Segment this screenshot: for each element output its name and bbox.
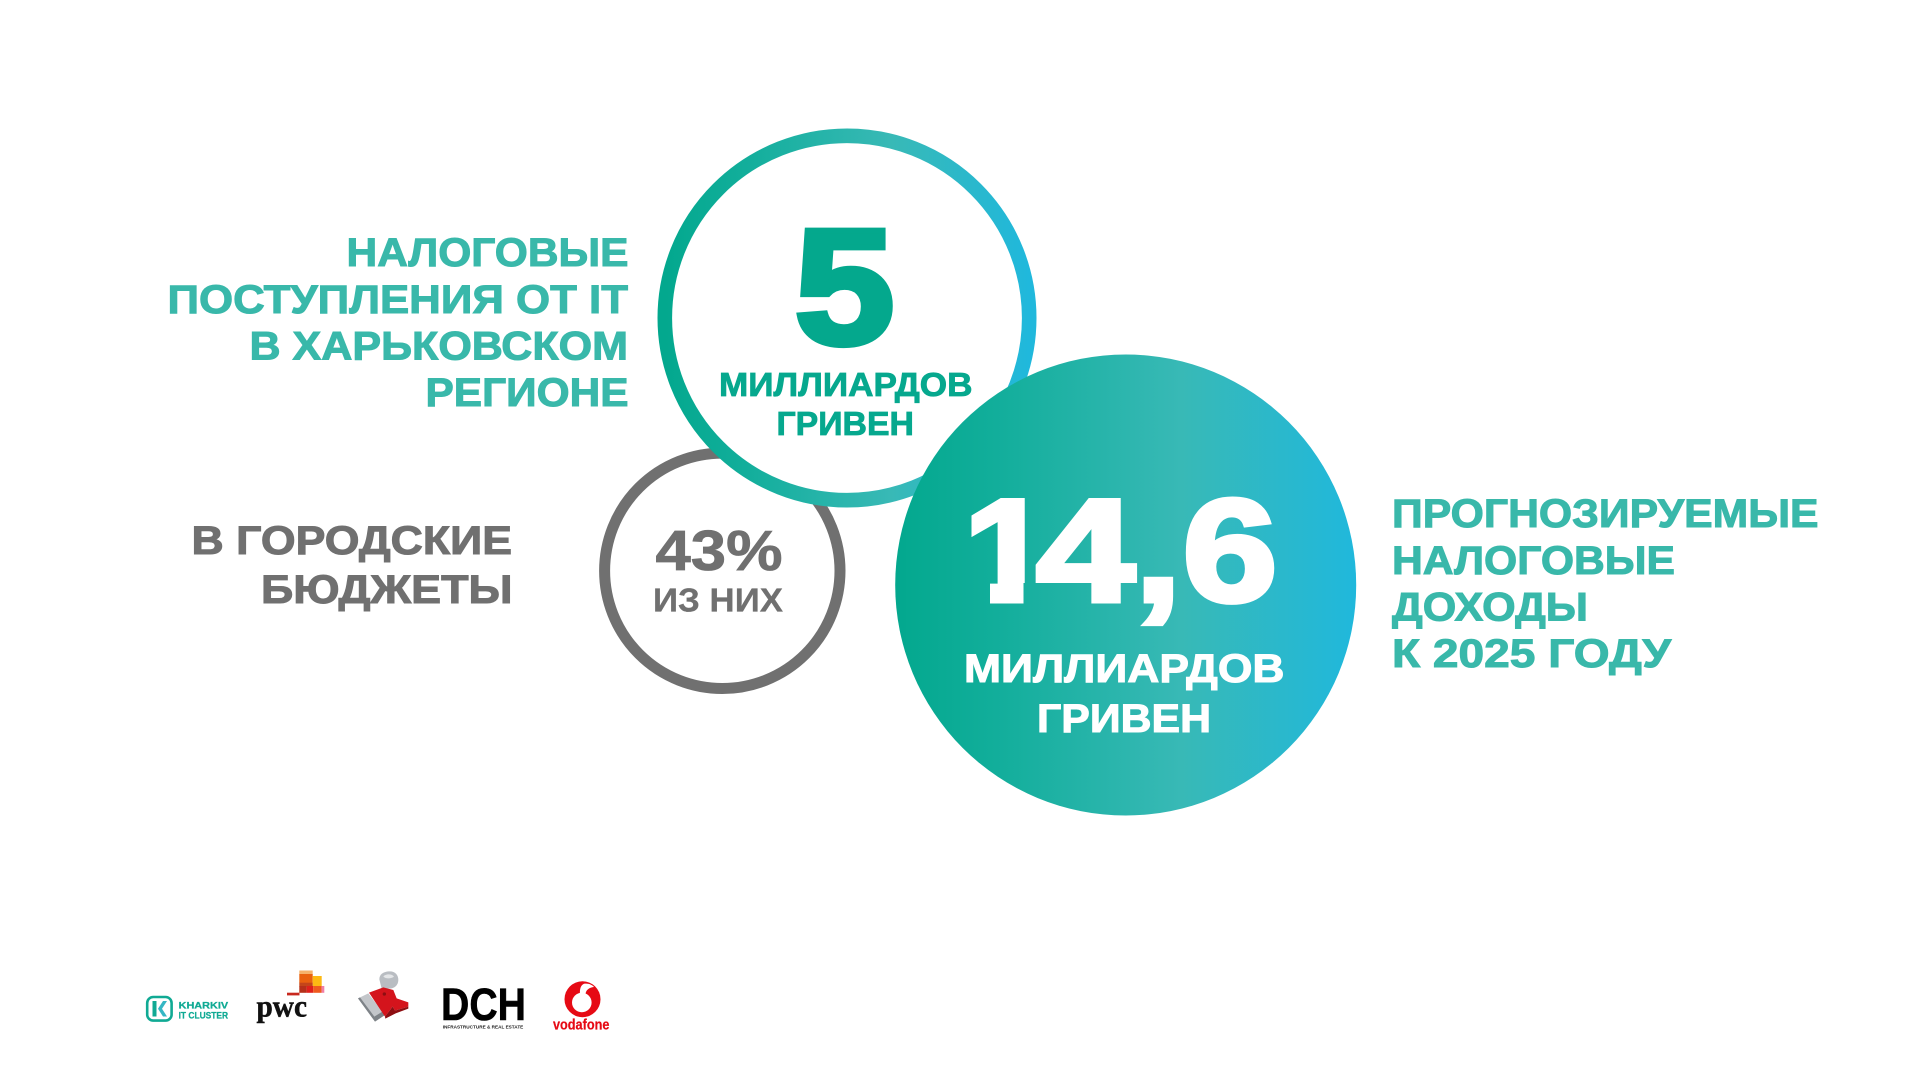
value: 14,6: 6 — [1182, 469, 1278, 632]
text block: city budgets label: В ГОРОДСКИЕ — [192, 519, 512, 563]
panel: ring circle 5 billion — [665, 136, 1029, 500]
caption: of them: ИЗ НИХ — [653, 581, 783, 618]
text block: city budgets label: БЮДЖЕТЫ — [261, 568, 512, 612]
logo: Kharkiv IT Cluster — [147, 997, 229, 1021]
panel: grey circle 43% — [605, 453, 840, 688]
caption: billion hryvnia — [964, 647, 1284, 741]
infographic canvas — [146, 128, 1818, 1030]
text block: projected tax income label: К 2025 ГОДУ — [1392, 632, 1672, 676]
text block: tax revenue label — [168, 231, 628, 415]
caption: billion hryvnia: ГРИВЕН — [776, 405, 914, 442]
panel: filled circle 14,6 billion — [895, 354, 1356, 816]
value: 14,6: , — [1135, 469, 1182, 632]
logo: DCH: INFRASTRUCTURE & REAL ESTATE — [443, 1024, 524, 1030]
text block: projected tax income label: ПРОГНОЗИРУЕМЫЕ — [1392, 492, 1818, 536]
text block: tax revenue label: ПОСТУПЛЕНИЯ ОТ IT — [168, 278, 628, 322]
text block: projected tax income label — [1392, 492, 1818, 676]
value: 5: 5 — [794, 196, 894, 378]
caption: billion hryvnia: МИЛЛИАРДОВ — [719, 366, 972, 403]
logo: Kharkiv IT Cluster: IT CLUSTER — [179, 1009, 228, 1020]
logo: red R with silver dollar — [358, 971, 408, 1022]
logo: Vodafone — [553, 981, 609, 1033]
logo: DCH: DCH — [441, 979, 526, 1030]
text block: projected tax income label: ДОХОДЫ — [1392, 585, 1588, 629]
text block: tax revenue label: В ХАРЬКОВСКОМ — [250, 324, 628, 368]
logo: Vodafone: vodafone — [553, 1017, 609, 1033]
text block: projected tax income label: НАЛОГОВЫЕ — [1392, 539, 1675, 583]
caption: billion hryvnia — [719, 366, 972, 442]
value: 43%: 43% — [656, 519, 782, 583]
caption: billion hryvnia: МИЛЛИАРДОВ — [964, 647, 1284, 691]
value: 14,6 — [972, 496, 1274, 626]
value: 14,6: 1 — [963, 469, 1051, 632]
value: 14,6: 4 — [1036, 469, 1135, 632]
logo: Kharkiv IT Cluster: KHARKIV — [179, 999, 229, 1010]
logo: PwC — [256, 970, 324, 1024]
text block: tax revenue label: РЕГИОНЕ — [426, 371, 628, 415]
logo: PwC: pwc — [256, 988, 307, 1024]
text block: tax revenue label: НАЛОГОВЫЕ — [346, 231, 628, 275]
text block: city budgets label — [192, 519, 512, 612]
caption: billion hryvnia: ГРИВЕН — [1037, 697, 1211, 741]
